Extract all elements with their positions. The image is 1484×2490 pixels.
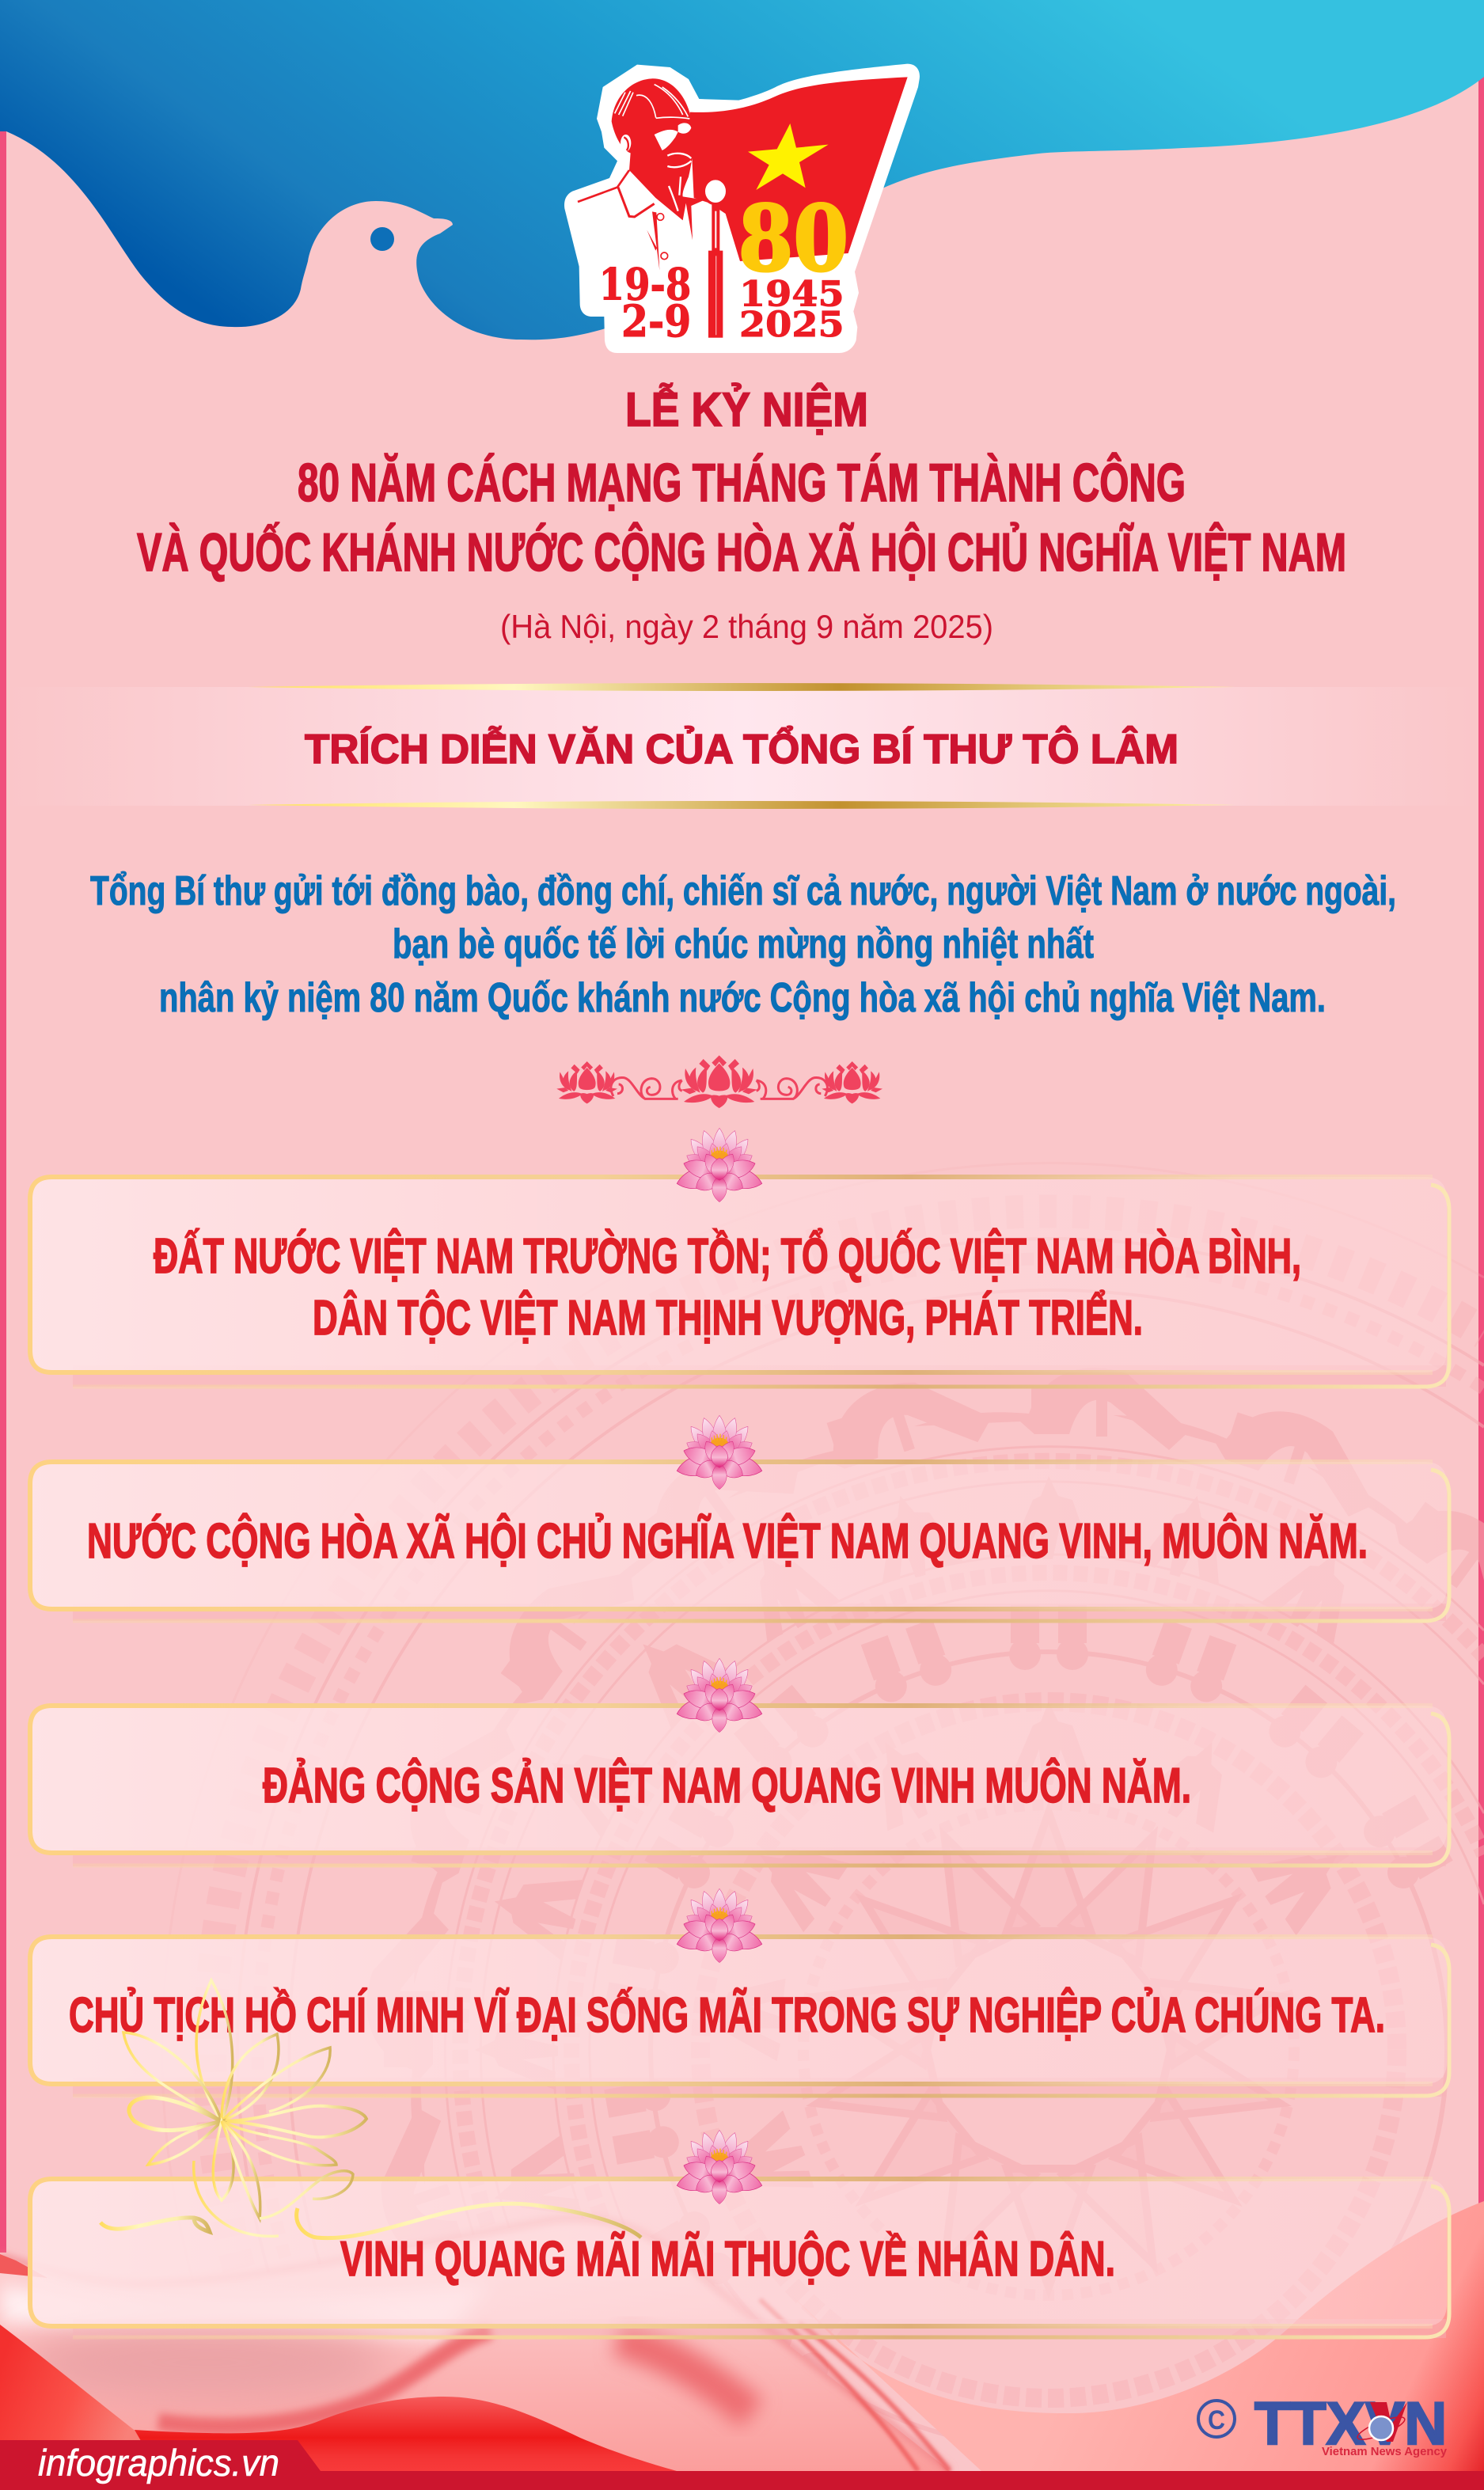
icon: lotus flower 3 [674, 1658, 765, 1733]
logo: TTXVN: TTXVN [1254, 2390, 1447, 2458]
bronze drum watermark [162, 1163, 1484, 2490]
intro text block [90, 868, 1396, 1021]
footer tab: infographics.vn [0, 2440, 321, 2490]
logo: TTXVN: Vietnam News Agency [1322, 2445, 1448, 2458]
panel: message 1 [30, 1177, 1449, 1387]
panel: message 2 [30, 1462, 1449, 1621]
text: panel 1 line 2: DÂN TỘC VIỆT NAM THỊNH VƯỢNG, PHÁT TRIỂN. [313, 1291, 1143, 1346]
ribbon background [0, 2201, 1484, 2471]
icon: gold lotus line art [101, 1980, 641, 2238]
icon: lotus flower 1 [674, 1128, 765, 1202]
icon: dove eye [370, 227, 394, 251]
panel: section header band [6, 683, 1478, 809]
text: 2-9: 2-9 [621, 295, 691, 347]
sky with dove silhouette [0, 0, 1484, 340]
icon: lotus flower 4 [674, 1888, 765, 1963]
icon: microphone [704, 179, 727, 338]
text: 19-8: 19-8 [599, 258, 691, 309]
text: 2025: 2025 [739, 305, 844, 345]
panel: message 3 [30, 1706, 1449, 1866]
icon: lotus flower 2 [674, 1415, 765, 1490]
icon: lotus ornament divider [556, 1055, 882, 1108]
title [137, 383, 1346, 583]
panel: message 4 [30, 1937, 1449, 2097]
text: 80: 80 [738, 186, 848, 292]
title: LỄ KỶ NIỆM [625, 383, 868, 436]
logo: 80 years emblem [564, 64, 920, 353]
text: panel 5: VINH QUANG MÃI MÃI THUỘC VỀ NHÂN DÂN. [340, 2232, 1115, 2287]
intro text block: bạn bè quốc tế lời chúc mừng nồng nhiệt nhất [393, 921, 1094, 967]
subtitle: place and date: (Hà Nội, ngày 2 tháng 9 năm 2025) [500, 608, 993, 645]
footer bar [0, 2471, 1484, 2490]
footer tab: infographics.vn: infographics.vn [38, 2442, 279, 2484]
section heading: TRÍCH DIỄN VĂN CỦA TỔNG BÍ THƯ TÔ LÂM [305, 726, 1178, 772]
logo: TTXVN: C [1208, 2405, 1225, 2435]
text: 1945: 1945 [739, 275, 844, 315]
icon: lotus flower 5 [674, 2130, 765, 2204]
panel: message 5 [30, 2179, 1449, 2338]
